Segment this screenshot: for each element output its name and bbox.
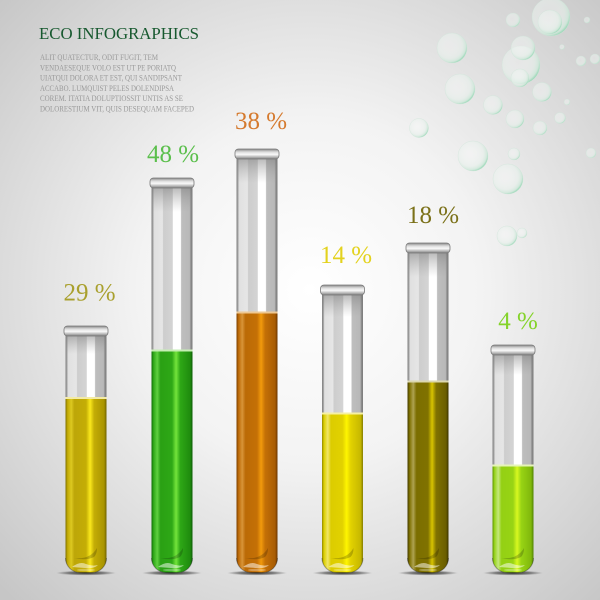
body text block: ACCABO. LUMQUIST PELES DOLENDIPSA [40,84,174,93]
percentage label: 38%: 38 % [235,108,287,135]
body text block: DOLORESTIUM VIT, QUIS DESEQUAM FACEPED [40,104,194,114]
bubbles [410,0,600,246]
title: ECO INFOGRAPHICS [39,24,199,43]
test tube 3: 38% [227,149,287,575]
test tube 1: 29% [56,326,116,575]
test tube 2: 48% [142,178,202,575]
test tube 6: 4% [483,345,543,575]
percentage label: 29%: 29 % [63,280,116,306]
body text block: COREM. ITATIA DOLUPTIOSSIT UNTIS AS SE [40,94,183,103]
body text block: UIATQUI DOLORA ET EST, QUI SANDIPSANT [40,74,182,83]
body text block: ALIT QUATECTUR, ODIT FUGIT, TEM [40,53,158,62]
percentage label: 14%: 14 % [320,242,372,269]
percentage label: 18%: 18 % [407,202,459,229]
body text block [40,53,194,114]
test tube 4: 14% [312,285,372,575]
test tube 5: 18% [398,243,458,575]
body text block: VENDAESEQUE VOLO EST UT PE PORIATQ [40,63,176,72]
percentage label: 4%: 4 % [498,308,538,335]
percentage label: 48%: 48 % [147,141,199,168]
